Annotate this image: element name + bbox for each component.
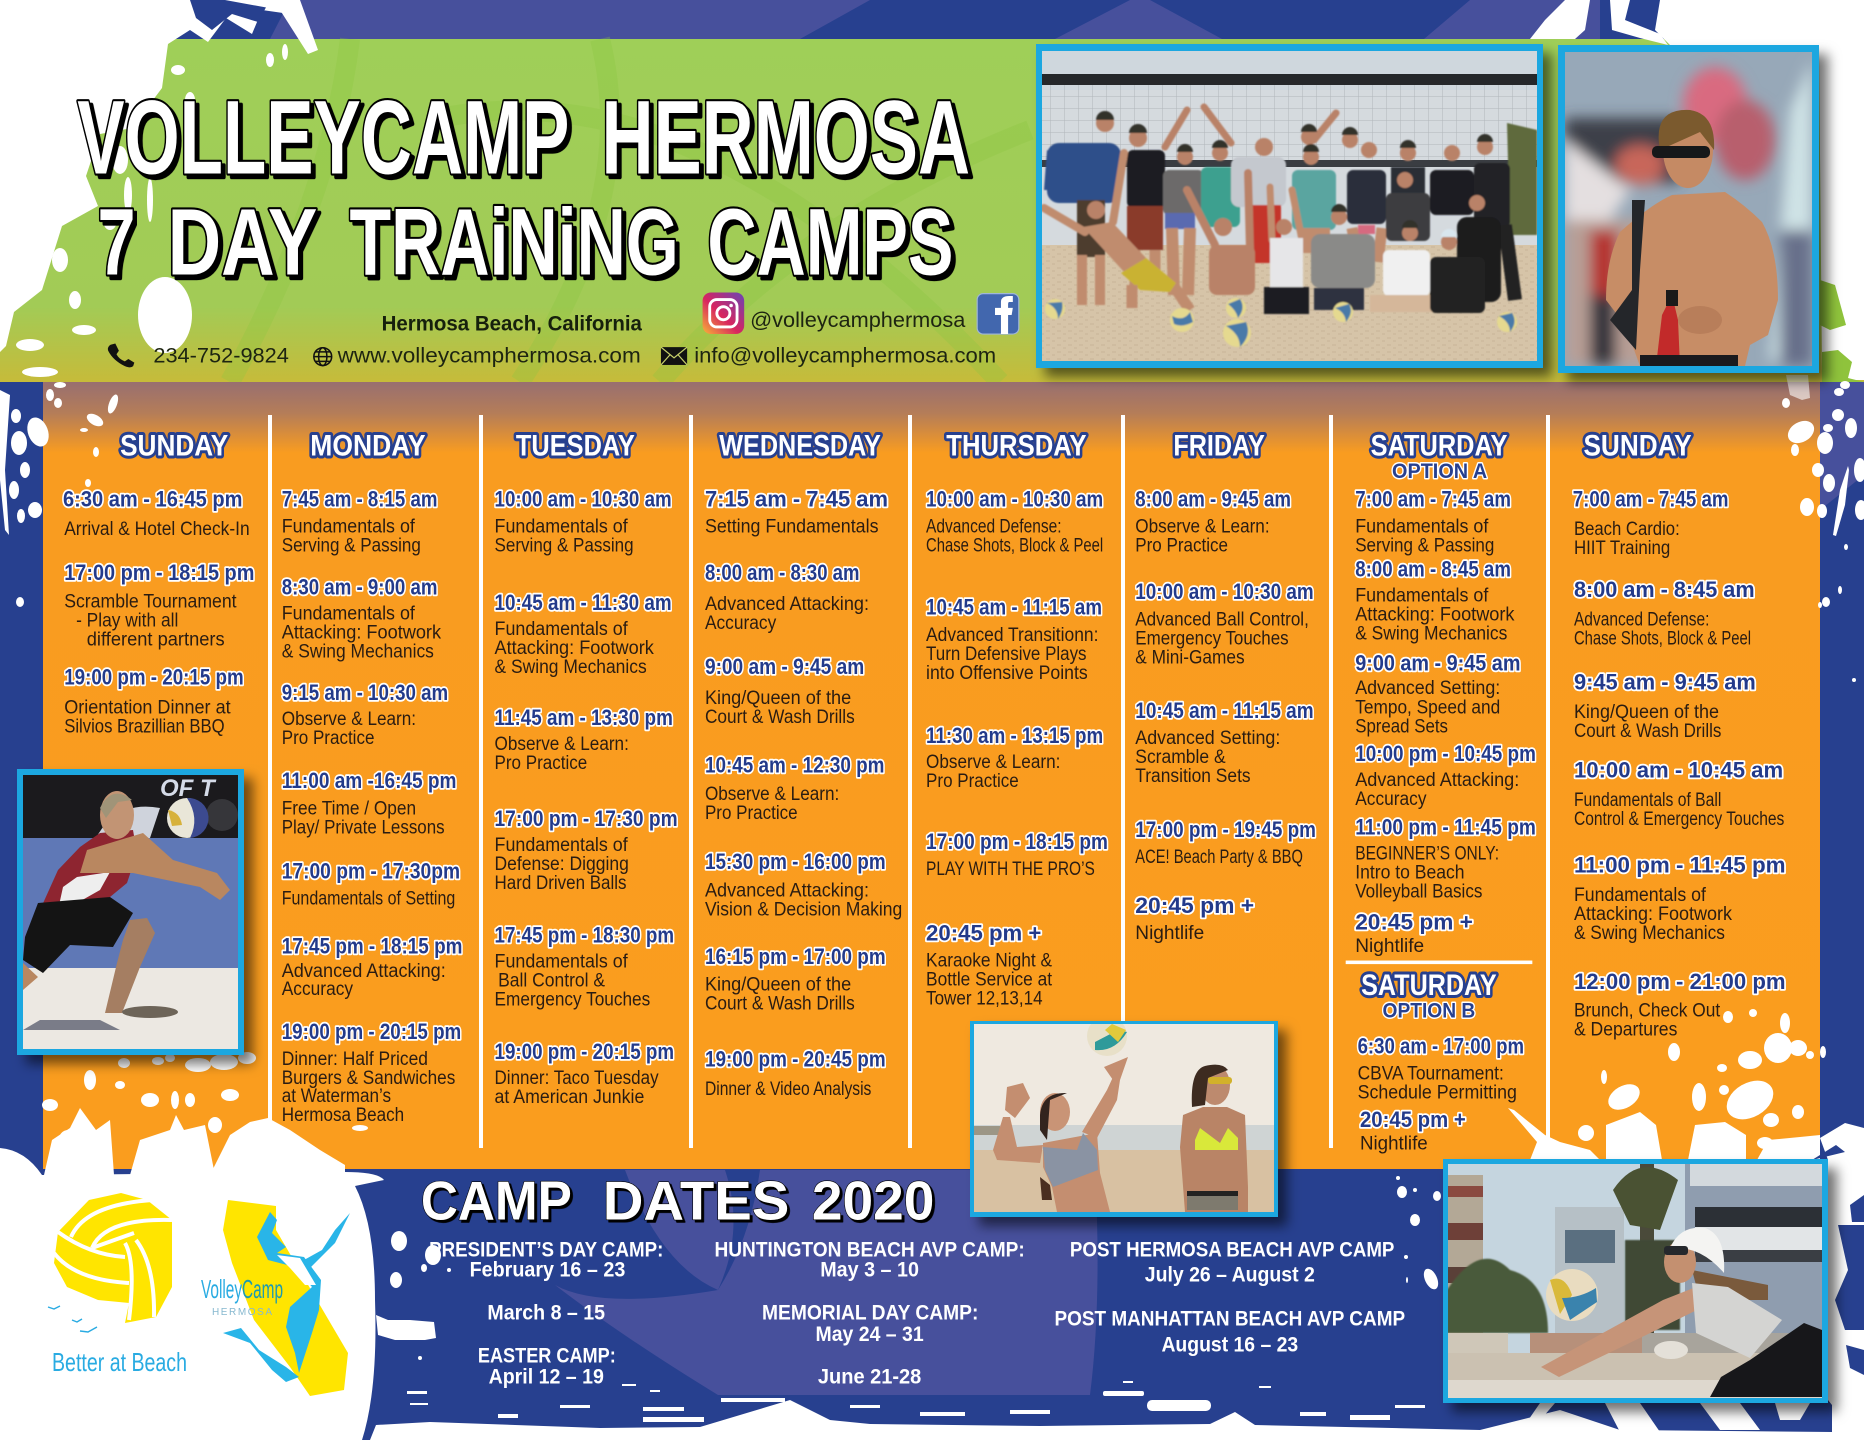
slot: observe: Pro Practice [1135, 536, 1228, 557]
slot: observe: Pro Practice [495, 753, 587, 774]
slot: observe: 9:15 am - 10:30 am [282, 680, 448, 705]
slot: free time [282, 768, 456, 838]
heading: Monday: MONDAY [310, 429, 426, 462]
slot: dinner: 19:00 pm - 20:15 pm [495, 1039, 674, 1064]
photo: male player digging: OF T [160, 775, 217, 802]
slot: attacking [1574, 853, 1786, 944]
slot: beginners: Volleyball Basics [1355, 882, 1482, 903]
column: Saturday options [1346, 429, 1536, 1155]
slot: observe: Observe & Learn: [495, 734, 629, 755]
slot: defense: Hard Driven Balls [495, 873, 626, 894]
slot: king queen: King/Queen of the [1574, 702, 1719, 723]
slot: nightlife: Nightlife [1135, 923, 1204, 944]
slot: ball control: Emergency Touches [495, 990, 650, 1011]
slot: observe: Observe & Learn: [705, 784, 839, 805]
slot: setting: Transition Sets [1135, 766, 1251, 787]
slot: attacking: Fundamentals of [1574, 885, 1707, 906]
slot: attacking: 11:00 pm - 11:45 pm [1574, 853, 1786, 878]
slot: beach party: 17:00 pm - 19:45 pm [1135, 817, 1316, 842]
slot: attacking: Attacking: Footwork [282, 622, 442, 643]
slot: setting [1135, 698, 1314, 787]
heads [1087, 114, 1493, 250]
slot: transition: Turn Defensive Plays [926, 644, 1087, 665]
slot: dinner [495, 1039, 674, 1108]
slot: attacking: 8:00 am - 8:45 am [1355, 557, 1511, 582]
slot: dinner: Burgers & Sandwiches [282, 1068, 455, 1089]
camp dates: column 3: POST HERMOSA BEACH AVP CAMP [1070, 1238, 1394, 1262]
slot: observe [282, 680, 448, 749]
slot: ball control: Ball Control & [498, 971, 605, 992]
slot: ball control: Emergency Touches [1135, 628, 1289, 649]
slot: karaoke: 20:45 pm + [926, 920, 1041, 945]
top band pattern [270, 0, 1600, 39]
slot: setting: Scramble & [1135, 747, 1226, 768]
slot: transition: into Offensive Points [926, 663, 1088, 684]
heading: Wednesday: WEDNESDAY [719, 429, 881, 462]
slot: attacking [495, 590, 672, 678]
camp dates heading: DATES [603, 1170, 789, 1232]
photo: two women on beach [970, 1016, 1278, 1217]
heading: Tuesday: TUESDAY [516, 429, 635, 462]
slot: CBVA: CBVA Tournament: [1358, 1063, 1504, 1084]
slot: vision: Advanced Attacking: [705, 880, 869, 901]
camp dates heading [421, 1170, 934, 1232]
slot: defense: Fundamentals of [495, 835, 628, 856]
slot: accuracy: Advanced Attacking: [282, 961, 446, 982]
heading: Sunday: SUNDAY [1583, 429, 1692, 462]
heading: Friday: FRIDAY [1173, 429, 1265, 462]
slot: cardio: Beach Cardio: [1574, 519, 1680, 540]
slot: observe: Observe & Learn: [926, 752, 1060, 773]
slot: ball control: Control & Emergency Touches [1574, 809, 1784, 830]
slot: setting [282, 859, 460, 910]
subheading: option A: OPTION A [1392, 459, 1487, 483]
slot: setting: 7:15 am - 7:45 am [705, 486, 888, 511]
logo text: Better at Beach: Better at Beach [52, 1347, 187, 1377]
location: Hermosa Beach, California [382, 311, 643, 335]
slot: CBVA [1358, 1033, 1524, 1103]
title: 7 [97, 190, 136, 296]
slot: ball control [495, 923, 674, 1011]
logo: VolleyCamp California [201, 1200, 350, 1396]
slot: CBVA: Schedule Permitting [1358, 1082, 1517, 1103]
slot: king queen: King/Queen of the [705, 688, 851, 709]
column: Tuesday [495, 429, 678, 1108]
slot: nightlife [1355, 910, 1473, 957]
slot: ball control: Advanced Ball Control, [1135, 609, 1309, 630]
slot: play with pros: PLAY WITH THE PRO’S [926, 859, 1095, 880]
slot: dinner: at American Junkie [495, 1087, 644, 1108]
slot: serving: 7:45 am - 8:15 am [282, 486, 437, 511]
slot: free time: Free Time / Open [282, 798, 416, 819]
camp dates: column 3: POST MANHATTAN BEACH AVP CAMP [1054, 1306, 1405, 1330]
slot: attacking: Attacking: Footwork [495, 638, 654, 659]
camp dates: column 1: EASTER CAMP: [478, 1343, 616, 1367]
slot: observe: 8:00 am - 9:45 am [1135, 486, 1291, 511]
slot: orientation dinner: Silvios Brazillian BBQ [64, 716, 225, 737]
slot: king queen 2: 16:15 pm - 17:00 pm [705, 944, 886, 969]
slot: accuracy: 17:45 pm - 18:15 pm [282, 933, 462, 958]
slot: setting: Setting Fundamentals [705, 517, 879, 538]
title: DAY [168, 190, 317, 296]
slot: observe: 10:45 am - 12:30 pm [705, 753, 884, 778]
logo text: VolleyCamp: VolleyCamp [201, 1274, 283, 1304]
slot: serving: Fundamentals of [1355, 517, 1489, 538]
slot: serving: Fundamentals of [495, 517, 628, 538]
slot: king queen: 9:00 am - 9:45 am [705, 654, 864, 679]
slot: nightlife: Nightlife [1355, 936, 1424, 957]
white splats: orange bottom right [1508, 1009, 1864, 1440]
slot: accuracy [705, 560, 869, 634]
slot: observe: Observe & Learn: [1135, 517, 1270, 538]
white splats: orange bottom left [42, 1052, 368, 1180]
slot: serving: Fundamentals of [282, 517, 416, 538]
slot: karaoke: Bottle Service at [926, 969, 1053, 990]
slot: king queen [705, 654, 864, 728]
slot: ball control: 10:00 am - 10:30 am [1135, 579, 1314, 604]
slot: setting: 10:45 am - 11:15 am [1135, 698, 1314, 723]
slot: vision: Vision & Decision Making [705, 899, 902, 920]
slot: nightlife B [1360, 1107, 1466, 1155]
slot: transition: Advanced Transitionn: [926, 625, 1098, 646]
back row [1047, 143, 1121, 203]
photo: group at beach net [1036, 44, 1543, 368]
slot: free time: Play/ Private Lessons [282, 817, 445, 838]
slot: serving: Serving & Passing [282, 536, 421, 557]
slot: scramble: Scramble Tournament [64, 591, 237, 612]
white splash: top left [0, 0, 318, 377]
slot: accuracy: Accuracy [282, 979, 354, 1000]
title: VOLLEYCAMP [77, 80, 569, 197]
slot: serving [495, 486, 672, 557]
slot: nightlife [1135, 893, 1254, 944]
camp dates: column 1 [429, 1238, 663, 1389]
slot: accuracy: Advanced Attacking: [705, 594, 869, 615]
slot: king queen: 9:45 am - 9:45 am [1574, 669, 1756, 694]
photo: woman passing with houses [1443, 1159, 1828, 1403]
title: CAMPS [707, 190, 953, 296]
column: Monday [282, 429, 462, 1126]
white splash: top right [1530, 0, 1864, 382]
heading: Saturday option B: SATURDAY [1361, 969, 1497, 1002]
slot: cardio [1573, 486, 1728, 559]
camp dates: column 2 [714, 1238, 1025, 1389]
slot: ball control: Fundamentals of Ball [1574, 790, 1721, 811]
slot: play with pros: 17:00 pm - 18:15 pm [926, 829, 1108, 854]
slot: dinner: Dinner: Taco Tuesday [495, 1068, 659, 1089]
slot: brunch: Brunch, Check Out [1574, 1000, 1721, 1021]
slot: setting: 9:00 am - 9:45 am [1355, 650, 1520, 675]
slot: serving [282, 486, 437, 557]
camp dates: column 2: MEMORIAL DAY CAMP: [762, 1301, 978, 1325]
slot: brunch: & Departures [1574, 1019, 1677, 1040]
camp dates: column 2: June 21-28 [818, 1365, 921, 1389]
slot: king queen 2: King/Queen of the [705, 974, 851, 995]
slot: attacking accuracy: Accuracy [1355, 789, 1427, 810]
slot: attacking [1355, 557, 1515, 645]
phone number: 234-752-9824 [153, 344, 289, 368]
slot: defense: Advanced Defense: [926, 517, 1062, 538]
slot: attacking: & Swing Mechanics [1574, 923, 1725, 944]
logo: Better at Beach volleyball [48, 1193, 187, 1377]
slot: observe: 11:30 am - 13:15 pm [926, 723, 1103, 748]
photo: player with sunglasses [1558, 45, 1819, 373]
slot: dinner [282, 1019, 461, 1126]
slot: king queen 2 [705, 944, 886, 1014]
slot: cardio: HIIT Training [1574, 538, 1670, 559]
slot: scramble [64, 560, 254, 651]
title [77, 80, 970, 296]
slot: setting: Spread Sets [1355, 716, 1448, 737]
slot: arrival [63, 486, 250, 540]
slot: setting: 17:00 pm - 17:30pm [282, 859, 460, 884]
slot: beach party: ACE! Beach Party & BBQ [1135, 847, 1303, 868]
slot: ball control: Fundamentals of [495, 952, 628, 973]
icon: instagram [703, 292, 744, 334]
slot: setting [705, 486, 888, 538]
slot: defense: 8:00 am - 8:45 am [1574, 577, 1755, 602]
camp dates: column 2: May 3 – 10 [820, 1258, 919, 1282]
slot: ball control: 10:00 am - 10:45 am [1574, 757, 1783, 782]
slot: dinner [705, 1046, 886, 1100]
slot: attacking: Fundamentals of [1355, 586, 1489, 607]
green header band [0, 39, 1864, 382]
icon: facebook [977, 294, 1019, 334]
instagram handle: @volleycamphermosa [750, 308, 965, 332]
slot: cardio: 7:00 am - 7:45 am [1573, 486, 1728, 511]
slot: dinner: Dinner: Half Priced [282, 1049, 428, 1070]
slot: observe [926, 723, 1103, 792]
slot: defense: Chase Shots, Block & Peel [1574, 628, 1751, 649]
column: Sunday departure [1573, 429, 1786, 1040]
icon: mail [661, 347, 687, 365]
column: Sunday [63, 429, 254, 737]
slot: nightlife B: 20:45 pm + [1360, 1107, 1466, 1132]
slot: free time: 11:00 am -16:45 pm [282, 768, 456, 793]
slot: observe: Observe & Learn: [282, 709, 416, 730]
slot: brunch: 12:00 pm - 21:00 pm [1574, 969, 1786, 994]
slot: observe: Pro Practice [282, 728, 374, 749]
slot: defense: Advanced Defense: [1574, 609, 1709, 630]
camp dates: column 2: HUNTINGTON BEACH AVP CAMP: [714, 1238, 1025, 1262]
slot: king queen 2: Court & Wash Drills [705, 993, 855, 1014]
slot: scramble: 17:00 pm - 18:15 pm [64, 560, 254, 585]
photo: male player digging [17, 769, 244, 1055]
slot: setting [1355, 650, 1520, 737]
heading: Sunday: SUNDAY [120, 429, 228, 462]
title: TRAiNiNG [350, 190, 679, 296]
slot: play with pros [926, 829, 1108, 880]
slot: beginners: BEGINNER’S ONLY: [1355, 843, 1499, 864]
camp dates heading: CAMP [421, 1170, 572, 1232]
slot: beginners: 11:00 pm - 11:45 pm [1355, 815, 1536, 840]
slot: defense [926, 486, 1103, 557]
column: Thursday [926, 429, 1108, 1010]
slot: attacking accuracy: 10:00 pm - 10:45 pm [1355, 741, 1536, 766]
camp dates heading: 2020 [812, 1170, 934, 1232]
slot: attacking: & Swing Mechanics [282, 641, 434, 662]
column: Wednesday [705, 429, 902, 1100]
icon: phone [108, 344, 134, 367]
slot: vision [705, 849, 902, 920]
slot: attacking [282, 574, 442, 662]
slot: serving: Serving & Passing [1355, 536, 1494, 557]
slot: observe [495, 705, 673, 774]
slot: attacking: & Swing Mechanics [1355, 624, 1507, 645]
slot: attacking: Fundamentals of [495, 619, 628, 640]
slot: defense: Defense: Digging [495, 854, 629, 875]
slot: nightlife B: Nightlife [1360, 1134, 1428, 1155]
slot: king queen [1574, 669, 1756, 742]
slot: karaoke: Tower 12,13,14 [926, 989, 1043, 1010]
slot: observe: 11:45 am - 13:30 pm [495, 705, 673, 730]
slot: attacking: Attacking: Footwork [1574, 904, 1733, 925]
slot: defense: 10:00 am - 10:30 am [926, 486, 1103, 511]
slot: scramble: - Play with all [76, 610, 178, 631]
camp dates: column 3 [1054, 1238, 1405, 1357]
camp dates: column 1: February 16 – 23 [470, 1258, 625, 1282]
arms raised [1165, 107, 1336, 147]
slot: defense: 17:00 pm - 17:30 pm [495, 806, 678, 831]
slot: orientation dinner: 19:00 pm - 20:15 pm [64, 665, 244, 690]
website: www.volleycamphermosa.com [337, 344, 641, 368]
slot: attacking accuracy: Advanced Attacking: [1355, 770, 1519, 791]
slot: beginners: Intro to Beach [1355, 863, 1465, 884]
slot: setting: Fundamentals of Setting [282, 889, 455, 910]
camp dates: column 1: PRESIDENT’S DAY CAMP: [429, 1238, 663, 1262]
logo text: Hermosa: HERMOSA [212, 1307, 272, 1318]
slot: vision: 15:30 pm - 16:00 pm [705, 849, 886, 874]
slot: arrival: 6:30 am - 16:45 pm [63, 486, 243, 511]
heading: Saturday: SATURDAY [1371, 429, 1508, 462]
slot: beginners [1355, 815, 1536, 903]
subheading: option B: OPTION B [1383, 999, 1475, 1023]
slot: observe [705, 753, 884, 824]
slot: observe: Pro Practice [705, 803, 798, 824]
slot: serving: Serving & Passing [495, 536, 634, 557]
slot: scramble: different partners [87, 630, 225, 651]
icon: globe [314, 348, 332, 366]
bottom grunge strip [370, 1381, 1832, 1440]
slot: nightlife: 20:45 pm + [1355, 910, 1473, 935]
orange schedule panel [43, 382, 1820, 1169]
slot: setting: Tempo, Speed and [1355, 697, 1500, 718]
slot: defense [495, 806, 678, 894]
slot: setting: Advanced Setting: [1135, 728, 1280, 749]
slot: attacking: & Swing Mechanics [495, 657, 647, 678]
slot: CBVA: 6:30 am - 17:00 pm [1358, 1033, 1524, 1058]
camp dates: column 1: April 12 – 19 [489, 1365, 604, 1389]
slot: dinner: 19:00 pm - 20:45 pm [705, 1046, 886, 1071]
front row [1044, 153, 1124, 232]
slot: orientation dinner: Orientation Dinner at [64, 697, 231, 718]
slot: attacking: Attacking: Footwork [1355, 605, 1515, 626]
camp dates: column 3: July 26 – August 2 [1145, 1263, 1315, 1287]
side pattern: right light blue [1820, 382, 1864, 510]
slot: transition [926, 595, 1102, 684]
bottom light blue swoosh [555, 1170, 1098, 1395]
slot: dinner: 19:00 pm - 20:15 pm [282, 1019, 461, 1044]
slot: accuracy: 8:00 am - 8:30 am [705, 560, 859, 585]
heading: Thursday: THURSDAY [946, 429, 1087, 462]
slot: ball control: 17:45 pm - 18:30 pm [495, 923, 674, 948]
slot: ball control: & Mini-Games [1135, 647, 1245, 668]
slot: karaoke [926, 920, 1053, 1010]
slot: defense [1574, 577, 1755, 649]
slot: nightlife: 20:45 pm + [1135, 893, 1254, 918]
slot: transition: 10:45 am - 11:15 am [926, 595, 1102, 620]
column dividers [268, 415, 1550, 1148]
slot: accuracy [282, 933, 462, 1000]
slot: attacking accuracy [1355, 741, 1536, 810]
slot: dinner: Hermosa Beach [282, 1105, 404, 1126]
slot: ball control [1135, 579, 1314, 668]
slot: karaoke: Karaoke Night & [926, 950, 1052, 971]
camp dates: column 1: March 8 – 15 [487, 1301, 605, 1325]
white splats: left edge [0, 382, 120, 607]
slot: setting: Advanced Setting: [1355, 678, 1500, 699]
slot: accuracy: Accuracy [705, 613, 777, 634]
slot: observe [1135, 486, 1291, 557]
email: info@volleycamphermosa.com [694, 344, 996, 368]
white splats: bottom blue scattered [376, 1176, 1441, 1360]
slot: serving: 7:00 am - 7:45 am [1355, 486, 1511, 511]
camp dates: column 3: August 16 – 23 [1161, 1333, 1298, 1357]
volleyballs [1045, 298, 1517, 347]
white splats: right edge [1782, 375, 1864, 682]
white panel: bottom left [0, 1148, 384, 1440]
column: Friday [1135, 429, 1316, 944]
slot: observe: Pro Practice [926, 771, 1019, 792]
title: HERMOSA [602, 80, 970, 197]
camp dates: column 2: May 24 – 31 [816, 1322, 924, 1346]
slot: attacking: 8:30 am - 9:00 am [282, 574, 437, 599]
slot: orientation dinner [64, 665, 244, 737]
slot: dinner: Dinner & Video Analysis [705, 1079, 871, 1100]
slot: brunch [1574, 969, 1786, 1040]
slot: king queen: Court & Wash Drills [705, 707, 855, 728]
slot: defense: Chase Shots, Block & Peel [926, 536, 1103, 557]
slot: attacking: Fundamentals of [282, 603, 416, 624]
slot: dinner: at Waterman’s [282, 1086, 391, 1107]
slot: king queen: Court & Wash Drills [1574, 721, 1721, 742]
slot: serving [1355, 486, 1511, 557]
slot: serving: 10:00 am - 10:30 am [495, 486, 672, 511]
slot: beach party [1135, 817, 1316, 868]
slot: arrival: Arrival & Hotel Check-In [64, 519, 250, 540]
slot: ball control [1574, 757, 1784, 830]
slot: attacking: 10:45 am - 11:30 am [495, 590, 672, 615]
